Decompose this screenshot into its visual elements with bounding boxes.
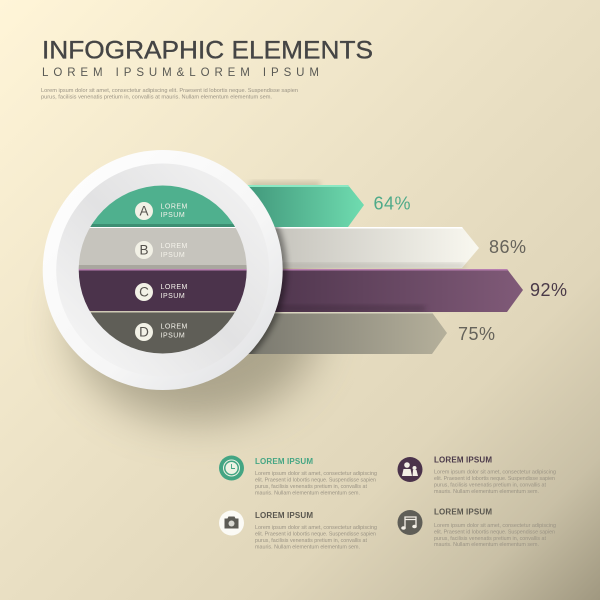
intro text [41, 88, 298, 100]
label D: LOREM [160, 324, 188, 330]
label C: C [139, 285, 149, 300]
text block: people: mauris. Nullam elementum elementum sem. [434, 489, 539, 495]
label C: LOREM [160, 284, 188, 291]
label D: IPSUM [160, 332, 185, 340]
icon: camera [219, 510, 244, 536]
bar D: 75% [240, 312, 447, 354]
percentage 64%: 64% [374, 194, 411, 214]
text block: camera: Lorem ipsum dolor sit amet, consectetur adipiscing [255, 525, 377, 531]
text block: music [434, 508, 556, 548]
circle shadow [70, 222, 320, 422]
label B: IPSUM [160, 252, 185, 259]
icon: people [398, 457, 422, 482]
bar A: 64% [240, 182, 364, 227]
text block: people [434, 456, 556, 495]
text block: camera: mauris. Nullam elementum elementum sem. [255, 544, 360, 550]
label A [135, 202, 188, 220]
percentage 86%: 86% [489, 237, 527, 257]
text block: camera [255, 511, 377, 550]
bar C: 92% [240, 269, 523, 312]
text block: music: elit. Praesent id lobortis neque. Suspendisse sapien [434, 530, 555, 536]
text block: music: purus, facilisis venenatis pretium in, convallis at [434, 536, 546, 542]
text block: music: mauris. Nullam elementum elementum sem. [434, 542, 539, 548]
text block: camera: elit. Praesent id lobortis neque. Suspendisse sapien [255, 532, 376, 538]
text block: clock: elit. Praesent id lobortis neque. Suspendisse sapien [255, 478, 376, 484]
text block: clock: Lorem ipsum dolor sit amet, consectetur adipiscing [255, 471, 377, 477]
label B: B [139, 243, 149, 258]
label B [135, 241, 188, 259]
percentage 75%: 75% [458, 324, 496, 344]
text block: clock: LOREM IPSUM [255, 457, 313, 466]
intro text: Lorem ipsum dolor sit amet, consectetur adipiscing elit. Praesent id lobortis neque. Suspendisse sapien [41, 88, 298, 94]
intro text: purus, facilisis venenatis pretium in, convallis at mauris. Nullam elementum elementum sem. [41, 94, 272, 100]
subtitle: LOREM IPSUM&LOREM IPSUM [42, 67, 319, 79]
icon: music [398, 510, 422, 535]
label C [135, 283, 188, 301]
label B: LOREM [160, 243, 188, 250]
text block: people: LOREM IPSUM [434, 456, 492, 464]
text block: people: elit. Praesent id lobortis neque. Suspendisse sapien [434, 476, 555, 482]
label A: A [139, 204, 149, 219]
label C: IPSUM [160, 293, 185, 300]
title: INFOGRAPHIC ELEMENTS [42, 36, 373, 64]
bar B: 86% [240, 227, 479, 268]
label A: IPSUM [160, 212, 185, 219]
ring [43, 150, 283, 390]
label D: D [139, 325, 149, 340]
text block: people: purus, facilisis venenatis pretium in, convallis at [434, 482, 546, 488]
icon: clock [219, 456, 244, 480]
ring shadow on bars [248, 227, 290, 354]
text block: people: Lorem ipsum dolor sit amet, consectetur adipiscing [434, 470, 556, 476]
bands inside ring [75, 185, 250, 354]
text block: music: LOREM IPSUM [434, 508, 492, 516]
text block: clock [255, 457, 377, 496]
text block: camera: purus, facilisis venenatis pretium in, convallis at [255, 538, 367, 544]
text block: clock: mauris. Nullam elementum elementum sem. [255, 490, 360, 496]
text block: camera: LOREM IPSUM [255, 511, 313, 520]
text block: music: Lorem ipsum dolor sit amet, consectetur adipiscing [434, 523, 556, 529]
label A: LOREM [160, 204, 188, 210]
percentage 92%: 92% [530, 280, 568, 300]
label D [135, 323, 188, 341]
text block: clock: purus, facilisis venenatis pretium in, convallis at [255, 484, 367, 490]
